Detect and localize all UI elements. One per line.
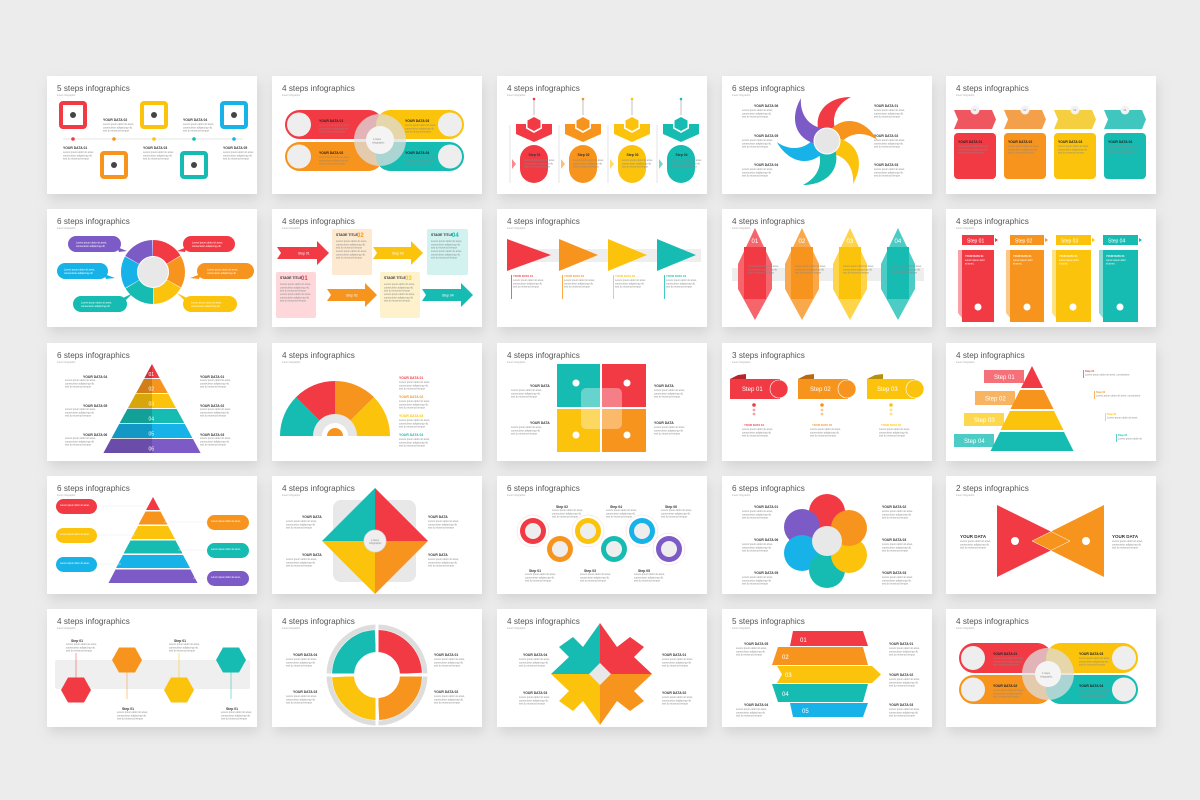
- slide 1: 5 steps squares: Insert Infographic: [57, 94, 76, 97]
- slide 4: 6 steps spiral: YOUR DATA 01: [874, 104, 898, 108]
- slide 16: 6 steps pyramid with pills: Lorem ipsum dolor sit amet,: [60, 533, 90, 536]
- slide 18: 6 steps circles: 6 steps infographics: [507, 484, 580, 493]
- slide 17: 4 steps diamond: Infographic: [369, 542, 382, 545]
- slide 1: 5 steps squares: 5 steps infographics: [57, 84, 130, 93]
- slide 25: 4 steps pills: YOUR DATA 04: [1079, 684, 1103, 688]
- slide 21: 4 steps hexagons: Step 01: [71, 639, 83, 643]
- slide 13: 4 steps quadrant: [497, 343, 709, 467]
- slide 5: 4 steps chevron boxes: Insert Infographic: [956, 94, 975, 97]
- slide 24: 5 steps stacked bars: YOUR DATA 05: [744, 642, 768, 646]
- slide 7: 4 steps arrows with stage boxes: Step 03: [392, 252, 404, 256]
- slide 15: 4 step pyramid: Lorem ipsum dolor sit amet, consectetur: [1085, 374, 1130, 376]
- slide 10: 4 steps step banners: sit amet,: [1013, 262, 1022, 266]
- slide 8: 4 steps triangle arrows: YOUR DATA 02: [564, 274, 584, 278]
- slide 10: 4 steps step banners: Lorem ipsum dolor: [1106, 259, 1126, 262]
- slide 15: 4 step pyramid: [946, 343, 1158, 467]
- slide 7: 4 steps arrows with stage boxes: Insert Infographic: [282, 227, 301, 230]
- slide 9: 4 steps diamonds: 04: [894, 239, 902, 245]
- slide 18: 6 steps circles: Step 05: [638, 569, 650, 573]
- slide 7: 4 steps arrows with stage boxes: 04: [452, 233, 459, 239]
- slide 16: 6 steps pyramid with pills: 6 steps infographics: [57, 484, 130, 493]
- slide 3: 4 steps hexagon pins: Step 02: [578, 153, 590, 157]
- slide 13: 4 steps quadrant: YOUR DATA: [654, 421, 674, 425]
- slide 24: 5 steps stacked bars: 03: [785, 673, 792, 679]
- slide 6: 6 steps ring with bubbles: Lorem ipsum dolor sit amet,: [64, 268, 95, 272]
- slide 10: 4 steps step banners: Step 03: [1061, 238, 1078, 244]
- slide 3: 4 steps hexagon pins: 4 steps infographics: [507, 84, 580, 93]
- slide 24: 5 steps stacked bars: 02: [782, 655, 789, 661]
- slide 21: 4 steps hexagons: Step 01: [174, 639, 186, 643]
- slide 11: 6 steps pyramid: YOUR DATA 01: [200, 375, 224, 379]
- slide 4: 6 steps spiral: [722, 76, 934, 200]
- slide 4: 6 steps spiral: YOUR DATA 03: [874, 163, 898, 167]
- slide 18: 6 steps circles: Step 04: [610, 505, 622, 509]
- slide 11: 6 steps pyramid: Insert Infographic: [57, 361, 76, 364]
- slide 20: 2 steps bowtie: 2 steps infographics: [956, 484, 1029, 493]
- slide 17: 4 steps diamond: 4 steps infographics: [282, 484, 355, 493]
- slide 14: 3 steps ribbons: [722, 343, 934, 467]
- slide 6: 6 steps ring with bubbles: consectetur adipiscing elit: [191, 305, 220, 308]
- slide 24: 5 steps stacked bars: YOUR DATA 04: [744, 703, 768, 707]
- slide 15: 4 step pyramid: Step 03: [974, 418, 995, 424]
- slide 10: 4 steps step banners: Insert Infographic: [956, 227, 975, 230]
- slide 6: 6 steps ring with bubbles: Lorem ipsum dolor sit amet,: [192, 242, 223, 244]
- slide 7: 4 steps arrows with stage boxes: Step 02: [346, 294, 358, 298]
- slide 18: 6 steps circles: Insert Infographic: [507, 494, 526, 497]
- slide 1: 5 steps squares: YOUR DATA 03: [143, 146, 167, 150]
- slide 9: 4 steps diamonds: 01: [752, 239, 759, 245]
- slide 6: 6 steps ring with bubbles: consectetur adipiscing elit: [81, 305, 110, 308]
- slide 14: 3 steps ribbons: Insert Infographic: [732, 361, 751, 364]
- slide 24: 5 steps stacked bars: YOUR DATA 03: [889, 703, 913, 707]
- slide 11: 6 steps pyramid: [47, 343, 259, 467]
- slide 17: 4 steps diamond: YOUR DATA: [428, 553, 448, 557]
- slide 3: 4 steps hexagon pins: Insert Infographic: [507, 94, 526, 97]
- slide 4: 6 steps spiral: YOUR DATA 05: [754, 134, 778, 138]
- slide 14: 3 steps ribbons: Step 02: [810, 387, 831, 393]
- slide 7: 4 steps arrows with stage boxes: Step 04: [442, 294, 454, 298]
- slide 2: 4 steps pills: YOUR DATA 02: [319, 151, 343, 155]
- slide 24: 5 steps stacked bars: 04: [782, 692, 789, 698]
- slide 25: 4 steps pills: YOUR DATA 03: [1079, 652, 1103, 656]
- slide 3: 4 steps hexagon pins: Step 03: [626, 153, 639, 157]
- slide 24: 5 steps stacked bars: YOUR DATA 02: [889, 673, 913, 677]
- slide 19: 6 steps flower: YOUR DATA 06: [754, 538, 778, 542]
- slide 9: 4 steps diamonds: 02: [798, 239, 806, 245]
- slide 23: 4 steps cross: YOUR DATA 01: [662, 653, 686, 657]
- slide 15: 4 step pyramid: Step 01: [1085, 369, 1095, 373]
- slide 8: 4 steps triangle arrows: [497, 209, 709, 333]
- slide 5: 4 steps chevron boxes: [946, 76, 1158, 200]
- slide 11: 6 steps pyramid: 01: [148, 372, 154, 378]
- slide 5: 4 steps chevron boxes: YOUR DATA 01: [958, 140, 982, 144]
- slide 17: 4 steps diamond: Insert Infographic: [282, 494, 301, 497]
- slide 6: 6 steps ring with bubbles: consectetur adipiscing elit: [192, 245, 221, 248]
- slide 25: 4 steps pills: Infographic: [1040, 676, 1053, 678]
- slide 6: 6 steps ring with bubbles: Lorem ipsum dolor sit amet,: [207, 268, 238, 272]
- slide 3: 4 steps hexagon pins: [497, 76, 709, 200]
- slide 5: 4 steps chevron boxes: 4 steps infographics: [956, 84, 1029, 93]
- slide 11: 6 steps pyramid: 04: [148, 416, 154, 422]
- slide 19: 6 steps flower: YOUR DATA 01: [754, 505, 778, 509]
- slide 12: 4 steps semicircle: YOUR DATA 03: [399, 414, 423, 418]
- slide 17: 4 steps diamond: YOUR DATA: [302, 515, 322, 519]
- slide 16: 6 steps pyramid with pills: Insert Infographic: [57, 494, 76, 497]
- slide 24: 5 steps stacked bars: 5 steps infographics: [732, 617, 805, 626]
- slide 4: 6 steps spiral: Insert Infographic: [732, 94, 751, 97]
- slide 24: 5 steps stacked bars: 05: [802, 709, 809, 715]
- slide 17: 4 steps diamond: YOUR DATA: [302, 553, 322, 557]
- slide 5: 4 steps chevron boxes: 04: [1124, 109, 1127, 112]
- slide 17: 4 steps diamond: [272, 476, 484, 600]
- slide 9: 4 steps diamonds: Insert Infographic: [732, 227, 751, 230]
- slide 16: 6 steps pyramid with pills: Lorem ipsum dolor sit amet,: [60, 562, 90, 565]
- slide 2: 4 steps pills: YOUR DATA 04: [405, 151, 429, 155]
- slide 21: 4 steps hexagons: [47, 609, 259, 733]
- slide 10: 4 steps step banners: YOUR DATA 01: [1013, 254, 1032, 258]
- slide 2: 4 steps pills: Infographic: [372, 142, 385, 144]
- slide 10: 4 steps step banners: sit amet,: [965, 262, 974, 266]
- slide 7: 4 steps arrows with stage boxes: 02: [357, 233, 364, 239]
- slide 8: 4 steps triangle arrows: YOUR DATA 01: [513, 274, 533, 278]
- slide 25: 4 steps pills: 4 steps infographics: [956, 617, 1029, 626]
- slide 5: 4 steps chevron boxes: 03: [1074, 109, 1077, 112]
- slide 23: 4 steps cross: YOUR DATA 02: [662, 691, 686, 695]
- slide 13: 4 steps quadrant: YOUR DATA: [530, 384, 550, 388]
- slide 6: 6 steps ring with bubbles: Lorem ipsum dolor sit amet,: [76, 242, 107, 244]
- slide 12: 4 steps semicircle: YOUR DATA 02: [399, 395, 423, 399]
- slide 11: 6 steps pyramid: 03: [148, 402, 154, 408]
- slide 10: 4 steps step banners: Step 01: [967, 238, 984, 244]
- slide 1: 5 steps squares: YOUR DATA 05: [223, 146, 247, 150]
- slide 20: 2 steps bowtie: YOUR DATA: [1112, 534, 1139, 539]
- slide 7: 4 steps arrows with stage boxes: Step 01: [298, 252, 310, 256]
- slide 19: 6 steps flower: YOUR DATA 03: [882, 538, 906, 542]
- slide 7: 4 steps arrows with stage boxes: STAGE TITLE: [431, 233, 454, 237]
- slide 21: 4 steps hexagons: Insert Infographic: [57, 627, 76, 630]
- slide 25: 4 steps pills: [946, 609, 1158, 733]
- slide 8: 4 steps triangle arrows: Insert Infographic: [507, 227, 526, 230]
- slide 2: 4 steps pills: 4 steps infographics: [282, 84, 355, 93]
- slide 6: 6 steps ring with bubbles: [47, 209, 259, 333]
- slide 24: 5 steps stacked bars: Insert Infographic: [732, 627, 751, 630]
- slide 3: 4 steps hexagon pins: Step 04: [676, 153, 688, 157]
- slide 7: 4 steps arrows with stage boxes: 4 steps infographics: [282, 217, 355, 226]
- slide 25: 4 steps pills: YOUR DATA 01: [993, 652, 1017, 656]
- slide 5: 4 steps chevron boxes: 01: [974, 109, 977, 112]
- slide 13: 4 steps quadrant: YOUR DATA: [654, 384, 674, 388]
- slide 22: 4 steps ring: YOUR DATA 01: [434, 653, 458, 657]
- slide 15: 4 step pyramid: Lorem ipsum dolor sit: [1118, 438, 1142, 440]
- slide 7: 4 steps arrows with stage boxes: STAGE TITLE: [336, 233, 359, 237]
- slide 15: 4 step pyramid: Step 04: [964, 439, 985, 445]
- slide 25: 4 steps pills: Insert Infographic: [956, 627, 975, 630]
- slide 16: 6 steps pyramid with pills: Lorem ipsum dolor sit amet,: [60, 504, 90, 507]
- slide 2: 4 steps pills: 4 steps: [373, 138, 382, 141]
- slide 20: 2 steps bowtie: Insert Infographic: [956, 494, 975, 497]
- slide 11: 6 steps pyramid: YOUR DATA 03: [200, 433, 224, 437]
- slide 11: 6 steps pyramid: 6 steps infographics: [57, 351, 130, 360]
- slide 10: 4 steps step banners: YOUR DATA 01: [1106, 254, 1125, 258]
- slide 19: 6 steps flower: 6 steps infographics: [732, 484, 805, 493]
- slide 9: 4 steps diamonds: 4 steps infographics: [732, 217, 805, 226]
- slide 6: 6 steps ring with bubbles: consectetur adipiscing elit: [76, 245, 105, 248]
- slide 16: 6 steps pyramid with pills: Lorem ipsum dolor sit amet,: [211, 548, 241, 551]
- slide 25: 4 steps pills: YOUR DATA 02: [993, 684, 1017, 688]
- slide 10: 4 steps step banners: sit amet,: [1059, 262, 1068, 266]
- slide 8: 4 steps triangle arrows: 4 steps infographics: [507, 217, 580, 226]
- slide 19: 6 steps flower: YOUR DATA 02: [882, 505, 906, 509]
- slide 24: 5 steps stacked bars: YOUR DATA 01: [889, 642, 913, 646]
- slide 12: 4 steps semicircle: YOUR DATA 04: [399, 433, 423, 437]
- slide 7: 4 steps arrows with stage boxes: STAGE TITLE: [384, 276, 407, 280]
- slide 23: 4 steps cross: YOUR DATA 03: [523, 691, 547, 695]
- slide 6: 6 steps ring with bubbles: 6 steps infographics: [57, 217, 130, 226]
- slide 11: 6 steps pyramid: YOUR DATA 04: [83, 375, 107, 379]
- slide 12: 4 steps semicircle: [272, 343, 484, 490]
- slide 22: 4 steps ring: YOUR DATA 03: [293, 690, 317, 694]
- slide 1: 5 steps squares: YOUR DATA 04: [183, 118, 207, 122]
- slide 15: 4 step pyramid: 4 step infographics: [956, 351, 1025, 360]
- slide 21: 4 steps hexagons: Step 01: [122, 707, 134, 711]
- slide 21: 4 steps hexagons: 4 steps infographics: [57, 617, 130, 626]
- slide 25: 4 steps pills: 4 steps: [1042, 672, 1051, 675]
- slide 23: 4 steps cross: [497, 609, 709, 733]
- slide 7: 4 steps arrows with stage boxes: STAGE TITLE: [280, 276, 303, 280]
- slide 20: 2 steps bowtie: [946, 476, 1158, 600]
- slide 5: 4 steps chevron boxes: YOUR DATA 03: [1058, 140, 1082, 144]
- slide 15: 4 step pyramid: Step 04: [1118, 433, 1128, 437]
- slide 19: 6 steps flower: [722, 476, 934, 600]
- slide 15: 4 step pyramid: Lorem ipsum dolor sit amet,: [1107, 416, 1138, 420]
- slide 12: 4 steps semicircle: YOUR DATA 01: [399, 376, 423, 380]
- slide 1: 5 steps squares: YOUR DATA 02: [103, 118, 127, 122]
- slide 14: 3 steps ribbons: YOUR DATA 01: [744, 423, 764, 427]
- slide 19: 6 steps flower: YOUR DATA 03: [882, 571, 906, 575]
- slide 21: 4 steps hexagons: Step 01: [226, 707, 238, 711]
- slide 15: 4 step pyramid: Step 02: [985, 396, 1006, 402]
- slide 2: 4 steps pills: [272, 76, 484, 200]
- slide 10: 4 steps step banners: Lorem ipsum dolor: [1059, 259, 1079, 262]
- slide 1: 5 steps squares: [47, 76, 259, 200]
- slide 2: 4 steps pills: YOUR DATA 03: [405, 119, 429, 123]
- slide 11: 6 steps pyramid: 06: [148, 446, 154, 452]
- slide 14: 3 steps ribbons: Step 01: [742, 387, 763, 393]
- slide 3: 4 steps hexagon pins: Step 01: [528, 153, 541, 157]
- slide 15: 4 step pyramid: Insert Infographic: [956, 361, 975, 364]
- slide 7: 4 steps arrows with stage boxes: 03: [405, 276, 412, 282]
- slide 10: 4 steps step banners: YOUR DATA 01: [1059, 254, 1078, 258]
- slide 2: 4 steps pills: Insert Infographic: [282, 94, 301, 97]
- slide 13: 4 steps quadrant: YOUR DATA: [530, 421, 550, 425]
- slide 18: 6 steps circles: Step 01: [529, 569, 541, 573]
- slide 16: 6 steps pyramid with pills: Lorem ipsum dolor sit amet,: [211, 520, 241, 523]
- slide 18: 6 steps circles: Step 02: [556, 505, 568, 509]
- slide 4: 6 steps spiral: 6 steps infographics: [732, 84, 805, 93]
- slide 18: 6 steps circles: Step 03: [584, 569, 596, 573]
- slide 4: 6 steps spiral: YOUR DATA 02: [874, 134, 898, 138]
- slide 20: 2 steps bowtie: YOUR DATA: [960, 534, 987, 539]
- slide 10: 4 steps step banners: Lorem ipsum dolor: [965, 259, 985, 262]
- slide 17: 4 steps diamond: 4 steps: [371, 539, 380, 542]
- slide 14: 3 steps ribbons: 3 steps infographics: [732, 351, 805, 360]
- slide 11: 6 steps pyramid: YOUR DATA 05: [83, 404, 107, 408]
- slide 10: 4 steps step banners: Lorem ipsum dolor: [1013, 259, 1033, 262]
- slide 6: 6 steps ring with bubbles: Lorem ipsum dolor sit amet,: [191, 302, 222, 304]
- slide 22: 4 steps ring: YOUR DATA 02: [434, 690, 458, 694]
- slide 13: 4 steps quadrant: 4 steps infographics: [507, 351, 580, 360]
- slide 22: 4 steps ring: YOUR DATA 04: [293, 653, 317, 657]
- slide 11: 6 steps pyramid: 02: [148, 386, 154, 392]
- slide 6: 6 steps ring with bubbles: Lorem ipsum dolor sit amet,: [81, 302, 112, 304]
- slide 23: 4 steps cross: 4 steps infographics: [507, 617, 580, 626]
- slide 17: 4 steps diamond: YOUR DATA: [428, 515, 448, 519]
- slide 14: 3 steps ribbons: YOUR DATA 02: [812, 423, 832, 427]
- slide 14: 3 steps ribbons: Step 03: [877, 387, 898, 393]
- slide 14: 3 steps ribbons: YOUR DATA 03: [881, 423, 901, 427]
- slide 10: 4 steps step banners: Step 04: [1108, 238, 1125, 244]
- slide 10: 4 steps step banners: YOUR DATA 01: [965, 254, 984, 258]
- slide 23: 4 steps cross: YOUR DATA 04: [523, 653, 547, 657]
- slide 8: 4 steps triangle arrows: YOUR DATA 03: [615, 274, 635, 278]
- slide 15: 4 step pyramid: Step 02: [1096, 390, 1106, 394]
- slide 5: 4 steps chevron boxes: 02: [1024, 109, 1027, 112]
- slide 19: 6 steps flower: YOUR DATA 05: [754, 571, 778, 575]
- slide 15: 4 step pyramid: Lorem ipsum dolor sit amet, consectetur: [1096, 394, 1141, 398]
- slide 9: 4 steps diamonds: [722, 209, 934, 333]
- slide 9: 4 steps diamonds: 03: [846, 239, 854, 245]
- slide 4: 6 steps spiral: YOUR DATA 04: [754, 163, 778, 167]
- slide 22: 4 steps ring: [272, 609, 484, 733]
- slide 12: 4 steps semicircle: 4 steps infographics: [282, 351, 355, 360]
- slide 11: 6 steps pyramid: YOUR DATA 06: [83, 433, 107, 437]
- slide 16: 6 steps pyramid with pills: Lorem ipsum dolor sit amet,: [211, 576, 241, 579]
- slide 11: 6 steps pyramid: 05: [148, 432, 154, 438]
- slide 7: 4 steps arrows with stage boxes: 01: [301, 276, 308, 282]
- slide 10: 4 steps step banners: Step 02: [1015, 238, 1032, 244]
- slide 11: 6 steps pyramid: YOUR DATA 02: [200, 404, 224, 408]
- slide 8: 4 steps triangle arrows: YOUR DATA 04: [666, 274, 686, 278]
- slide 10: 4 steps step banners: [946, 209, 1158, 333]
- slide 22: 4 steps ring: Insert Infographic: [282, 627, 301, 630]
- slide 24: 5 steps stacked bars: 01: [800, 638, 807, 644]
- slide 7: 4 steps arrows with stage boxes: [272, 209, 484, 333]
- slide 15: 4 step pyramid: Step 03: [1107, 412, 1117, 416]
- slide 24: 5 steps stacked bars: [722, 609, 934, 733]
- slide 5: 4 steps chevron boxes: YOUR DATA 04: [1108, 140, 1132, 144]
- slide 5: 4 steps chevron boxes: YOUR DATA 02: [1008, 140, 1032, 144]
- slide 13: 4 steps quadrant: Insert Infographic: [507, 361, 526, 364]
- slide 1: 5 steps squares: YOUR DATA 01: [63, 146, 87, 150]
- slide 4: 6 steps spiral: YOUR DATA 06: [754, 104, 778, 108]
- slide 6: 6 steps ring with bubbles: consectetur adipiscing elit: [64, 272, 93, 275]
- slide 6: 6 steps ring with bubbles: consectetur adipiscing elit: [207, 272, 236, 275]
- slide 2: 4 steps pills: YOUR DATA 01: [319, 119, 343, 123]
- slide 22: 4 steps ring: 4 steps infographics: [282, 617, 355, 626]
- slide 10: 4 steps step banners: 4 steps infographics: [956, 217, 1029, 226]
- slide 19: 6 steps flower: Insert Infographic: [732, 494, 751, 497]
- slide 15: 4 step pyramid: Step 01: [994, 375, 1015, 381]
- slide 12: 4 steps semicircle: Insert Infographic: [282, 361, 301, 364]
- slide 6: 6 steps ring with bubbles: Insert Infographic: [57, 227, 76, 230]
- slide 23: 4 steps cross: Insert Infographic: [507, 627, 526, 630]
- slide 18: 6 steps circles: Step 06: [665, 505, 677, 509]
- slide 18: 6 steps circles: [497, 476, 709, 600]
- slide 10: 4 steps step banners: sit amet,: [1106, 262, 1115, 266]
- slide 16: 6 steps pyramid with pills: [47, 476, 259, 600]
